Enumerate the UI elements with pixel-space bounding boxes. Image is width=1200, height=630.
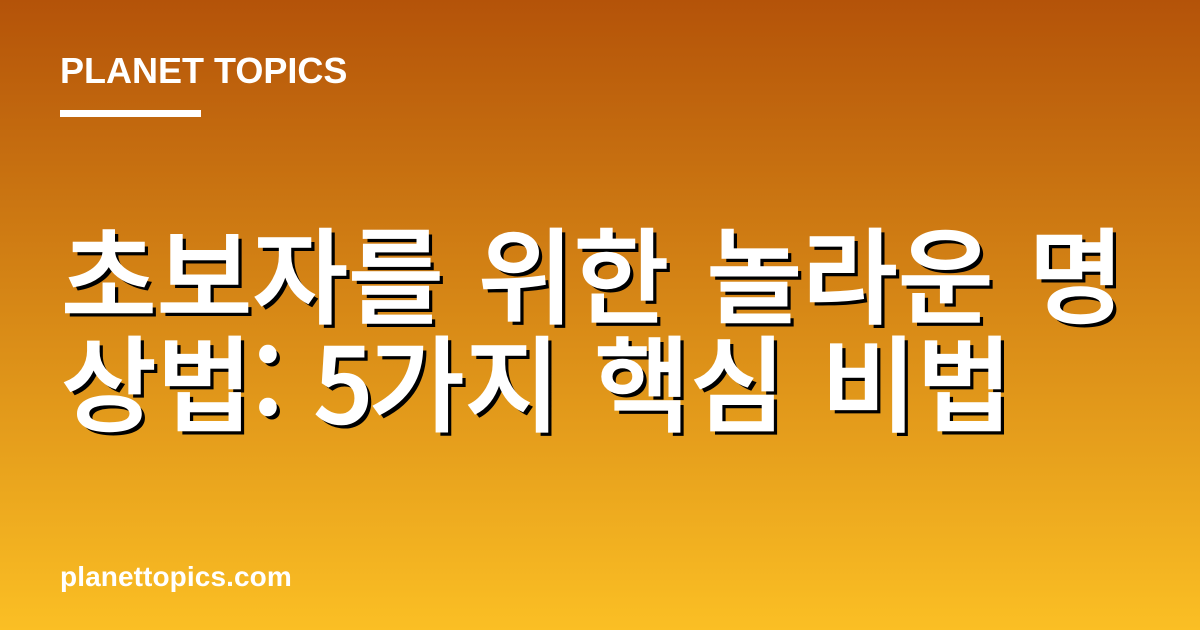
accent rule under brand (60, 110, 201, 117)
brand heading: PLANET TOPICS (60, 50, 347, 91)
title (61, 194, 1124, 453)
title: 초보자를 위한 놀라운 명 (61, 194, 1124, 345)
website url: planettopics.com (60, 561, 292, 592)
title: 상법: 5가지 핵심 비법 (61, 302, 1012, 453)
